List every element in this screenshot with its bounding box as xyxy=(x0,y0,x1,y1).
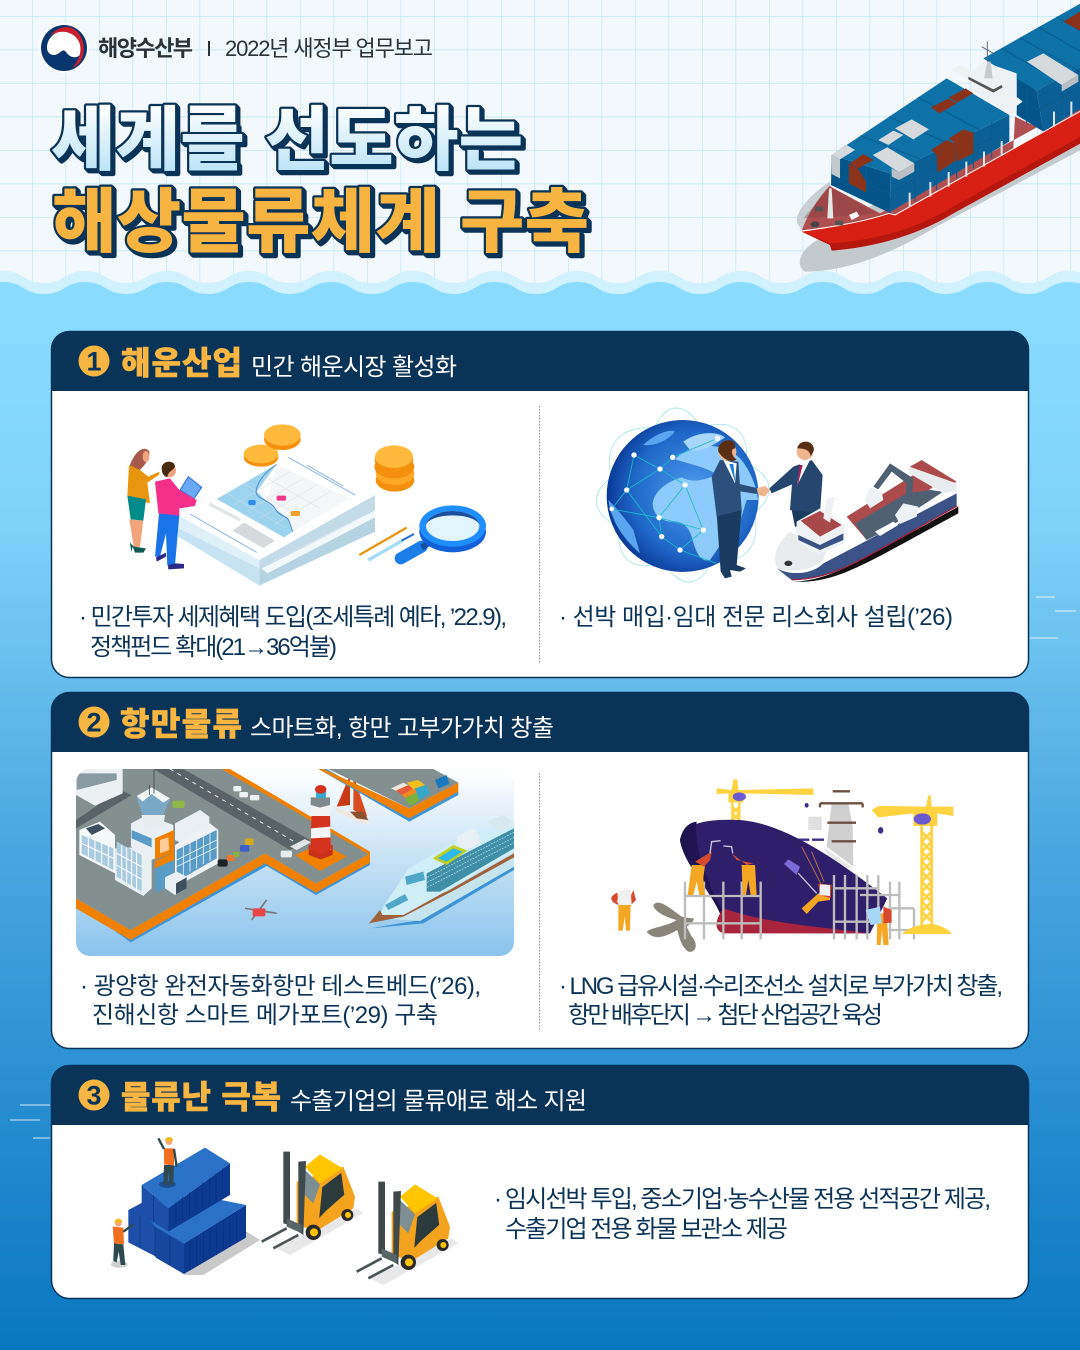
heading 항만물류: 항만물류 xyxy=(120,706,242,742)
wave and sea background xyxy=(0,282,1080,1350)
divider xyxy=(538,406,540,663)
panel header xyxy=(51,331,1029,391)
bullet text: temporary vessels xyxy=(494,1186,991,1243)
decorative current marks: right xyxy=(1030,597,1076,638)
panel 1: shipping industry xyxy=(51,331,1029,678)
bullet text: LNG and repair: · LNG 급유시설·수리조선소 설치로 부가가치 창출, xyxy=(559,973,1003,1000)
bullet text: LNG and repair xyxy=(559,973,1003,1029)
bullet text: temporary vessels: 수출기업 전용 화물 보관소 제공 xyxy=(505,1216,788,1243)
bullet text: leasing company: · 선박 매입·임대 전문 리스회사 설립(’26) xyxy=(559,604,953,631)
number badge 3 xyxy=(78,1080,110,1110)
heading 물류난 극복: 물류난 극복 xyxy=(121,1079,281,1115)
number badge 3: 3 xyxy=(86,1080,102,1110)
bullet text: Gwangyang port: 진해신항 스마트 메가포트(’29) 구축 xyxy=(92,1002,438,1029)
panel header xyxy=(51,1065,1029,1125)
title line 1: 세계를 선도하는 xyxy=(51,101,523,179)
panel body xyxy=(52,332,1028,678)
bullet text: Gwangyang port: · 광양항 완전자동화항만 테스트베드(’26), xyxy=(80,973,481,1000)
bullet text: tax benefits xyxy=(79,604,507,661)
wave: light foam layer xyxy=(0,271,1080,320)
illustration: handshake with globe and ship xyxy=(585,401,958,589)
panel 3: overcoming logistics disruption xyxy=(51,1065,1029,1298)
panel 2: port logistics xyxy=(51,692,1029,1048)
number badge 1: 1 xyxy=(86,346,102,376)
number badge 2: 2 xyxy=(86,708,102,738)
panel body xyxy=(52,692,1028,1048)
bullet text: tax benefits: 정책펀드 확대(21→36억불) xyxy=(90,634,337,661)
illustration: containers and forklifts xyxy=(111,1137,458,1285)
bullet text: LNG and repair: 항만 배후단지 → 첨단 산업공간 육성 xyxy=(568,1002,883,1029)
illustration: investors reviewing chart documents with coins and magnifier xyxy=(127,424,486,586)
number badge 1 xyxy=(78,346,110,376)
icon: government taegeuk logo xyxy=(39,23,89,73)
divider xyxy=(538,773,540,1031)
subheading: 스마트화, 항만 고부가가치 창출 xyxy=(250,715,554,742)
bullet text: Gwangyang port xyxy=(80,973,481,1029)
panel body xyxy=(52,1066,1028,1298)
background: grid paper xyxy=(0,0,1080,300)
number badge 2 xyxy=(78,706,110,738)
illustration: container ship xyxy=(797,0,1080,272)
ministry name: 해양수산부 xyxy=(98,36,193,61)
subheading: 민간 해운시장 활성화 xyxy=(251,354,457,381)
illustration: smart port isometric xyxy=(76,769,514,956)
decorative current marks: left xyxy=(10,1105,50,1138)
heading 해운산업: 해운산업 xyxy=(121,345,242,381)
separator xyxy=(208,41,210,56)
title line 2: 해상물류체계 구축 xyxy=(52,183,589,261)
bullet text: tax benefits: · 민간투자 세제혜택 도입(조세특례 예타, ’22.9), xyxy=(79,604,507,631)
panel header xyxy=(51,692,1029,752)
bullet text: temporary vessels: · 임시선박 투입, 중소기업·농수산물 전용 선적공간 제공, xyxy=(494,1186,991,1213)
illustration: shipyard with crew and cranes xyxy=(611,779,953,952)
report label: 2022년 새정부 업무보고 xyxy=(225,36,433,61)
subheading: 수출기업의 물류애로 해소 지원 xyxy=(290,1088,587,1115)
